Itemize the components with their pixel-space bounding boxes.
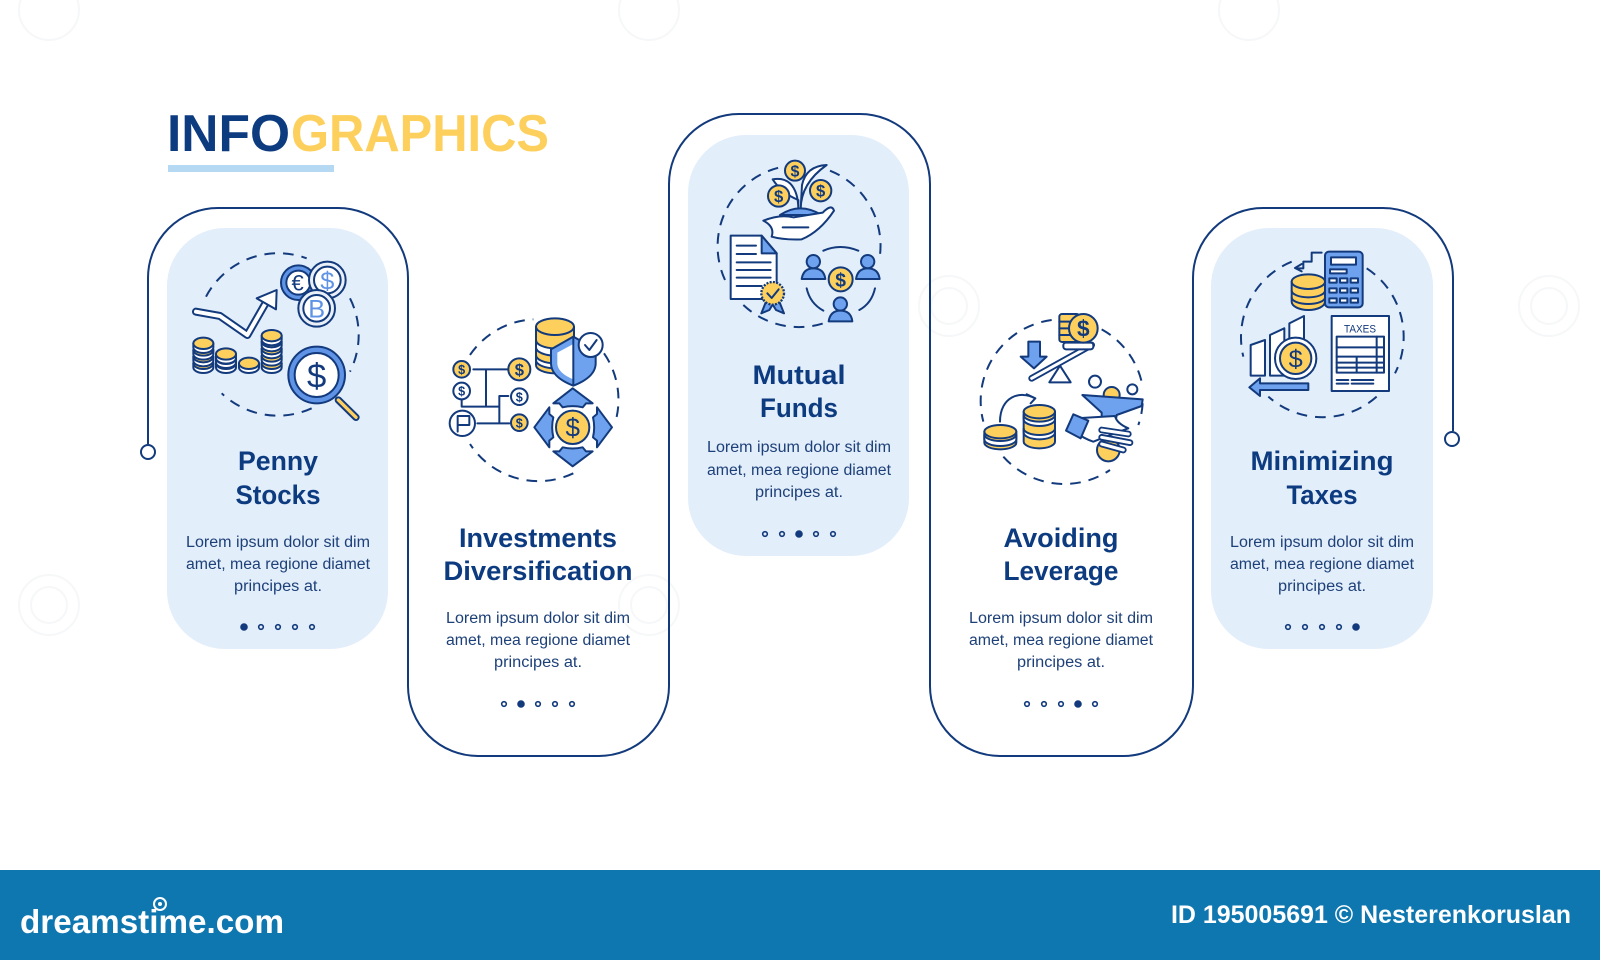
- text: Penny Stocks body: [186, 534, 371, 595]
- icon: penny stocks: €: [292, 271, 304, 296]
- text: Investments body: principes at.: [494, 654, 582, 671]
- icon: investments diversification: $: [516, 390, 523, 404]
- text: Minimizing Taxes body: principes at.: [1278, 578, 1366, 595]
- panel: Mutual Funds background: [688, 135, 909, 556]
- pagination dots 1: [241, 624, 314, 630]
- heading: Investments Diversification: [444, 523, 632, 586]
- icon: investments diversification: $: [458, 385, 465, 399]
- text: Penny Stocks body: amet, mea regione diamet: [186, 556, 371, 573]
- text: Investments body: Lorem ipsum dolor sit dim: [446, 610, 630, 627]
- icon: avoiding leverage: [981, 314, 1143, 484]
- text: Penny Stocks body: principes at.: [234, 578, 322, 595]
- text: Avoiding Leverage body: principes at.: [1017, 654, 1105, 671]
- footer banner: ID 195005691 © Nesterenkoruslan: [1171, 901, 1571, 929]
- icon: minimizing taxes: TAXES: [1344, 323, 1376, 335]
- icon: mutual funds: $: [774, 187, 784, 206]
- text: Mutual Funds body: amet, mea regione diamet: [707, 462, 892, 479]
- heading: Penny Stocks: Penny: [238, 446, 318, 476]
- pagination dots 4: [1025, 701, 1097, 707]
- text: Mutual Funds body: [707, 439, 892, 501]
- title: [167, 105, 549, 172]
- icon: penny stocks: $: [320, 267, 334, 295]
- footer banner: [0, 870, 1600, 960]
- panel: Penny Stocks background: [167, 228, 388, 649]
- icon: mutual funds: $: [835, 270, 846, 291]
- footer banner: dreamstime.com: [20, 903, 284, 940]
- text: Avoiding Leverage body: [969, 610, 1154, 671]
- heading: Penny Stocks: [236, 446, 320, 510]
- icon: penny stocks: $: [307, 357, 326, 395]
- text: Avoiding Leverage body: Lorem ipsum dolor sit dim: [969, 610, 1153, 627]
- icon: investments diversification: $: [516, 416, 523, 430]
- icon: penny stocks: [193, 253, 359, 417]
- heading: Investments Diversification: Investments: [459, 523, 617, 553]
- text: Mutual Funds body: Lorem ipsum dolor sit dim: [707, 439, 891, 456]
- icon: avoiding leverage: $: [1077, 316, 1090, 342]
- text: Avoiding Leverage body: amet, mea regione diamet: [969, 632, 1154, 649]
- heading: Mutual Funds: [752, 360, 846, 423]
- icon: investments diversification: $: [515, 360, 525, 379]
- text: Minimizing Taxes body: Lorem ipsum dolor sit dim: [1230, 534, 1414, 551]
- connecting outline with end circles: [141, 114, 1459, 756]
- icon: mutual funds: $: [816, 182, 826, 201]
- heading: Investments Diversification: Diversification: [444, 556, 632, 586]
- icon: investments diversification: $: [565, 413, 580, 443]
- heading: Avoiding Leverage: [1004, 523, 1118, 586]
- heading: Minimizing Taxes: Minimizing: [1250, 446, 1394, 476]
- icon: minimizing taxes: [1241, 252, 1404, 417]
- icon: mutual funds: $: [791, 164, 800, 181]
- heading: Mutual Funds: Mutual: [752, 360, 846, 390]
- icon: mutual funds: [718, 161, 881, 327]
- icon: investments diversification: [450, 318, 618, 481]
- icon: minimizing taxes: $: [1289, 346, 1303, 374]
- pagination dots 3: [763, 531, 835, 537]
- text: Minimizing Taxes body: [1230, 534, 1415, 595]
- heading: Minimizing Taxes: [1250, 446, 1394, 510]
- pagination dots 5: [1286, 624, 1359, 630]
- heading: Mutual Funds: Funds: [760, 393, 838, 423]
- panel: Minimizing Taxes background: [1211, 228, 1433, 649]
- text: Mutual Funds body: principes at.: [755, 484, 843, 501]
- icon: investments diversification: $: [458, 363, 465, 377]
- text: Minimizing Taxes body: amet, mea regione diamet: [1230, 556, 1415, 573]
- heading: Penny Stocks: Stocks: [236, 480, 320, 510]
- text: Investments body: amet, mea regione diamet: [446, 632, 631, 649]
- icon: penny stocks: B: [308, 295, 325, 323]
- pagination dots 2: [502, 701, 574, 707]
- title: GRAPHICS: [291, 105, 549, 163]
- text: Penny Stocks body: Lorem ipsum dolor sit dim: [186, 534, 370, 551]
- heading: Avoiding Leverage: Leverage: [1004, 556, 1118, 586]
- title: INFO: [167, 105, 290, 163]
- text: Investments body: [446, 610, 631, 671]
- heading: Minimizing Taxes: Taxes: [1286, 480, 1358, 510]
- heading: Avoiding Leverage: Avoiding: [1004, 523, 1118, 553]
